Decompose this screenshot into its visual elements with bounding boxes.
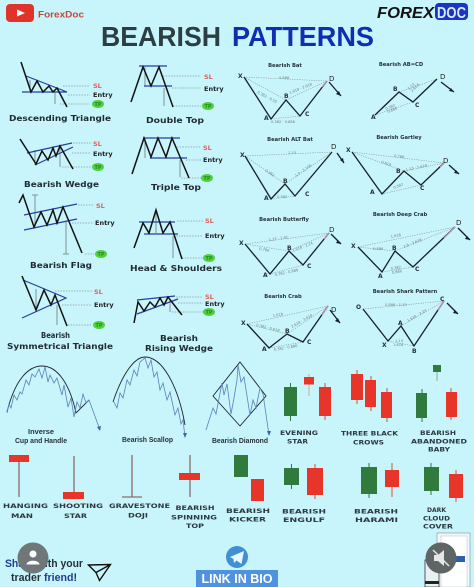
- candlestick: Gravestone Doji: GRAVESTONE: [109, 503, 170, 510]
- candlestick: Evening Star: STAR: [287, 438, 308, 446]
- harmonic pattern: Bearish Gartley: [346, 135, 459, 196]
- harmonic pattern: Bearish Shark: 1.618: [393, 343, 404, 347]
- harmonic pattern: Bearish ALT Bat: X: [240, 152, 245, 159]
- chart pattern: Bearish Flag: [19, 195, 115, 270]
- chart pattern: Head and Shoulders: Entry: [205, 232, 225, 240]
- harmonic pattern: Bearish Butterfly: X: [239, 240, 244, 247]
- harmonic pattern: Bearish ALT Bat: 0.382: [277, 195, 287, 199]
- harmonic pattern: Bearish Gartley: 0.618: [381, 160, 392, 167]
- harmonic pattern: Bearish Crab: 1.618: [272, 312, 284, 318]
- harmonic pattern: Bearish Shark: O: [356, 304, 361, 311]
- candlestick: Bearish Harami: [354, 463, 399, 524]
- harmonic pattern: Bearish Deep Crab: B: [392, 245, 397, 252]
- harmonic pattern: Bearish ALT Bat: 1.0 · 3.106: [294, 163, 313, 178]
- harmonic pattern: Bearish ALT Bat: 0.382: [264, 169, 275, 178]
- chart pattern: Bearish Flag: SL: [96, 202, 105, 210]
- harmonic pattern: Bearish Shark: 1.618 · 2.24: [406, 308, 428, 323]
- chart pattern: Descending Triangle: Descending Triangle: [9, 114, 112, 123]
- harmonic pattern: Bearish Butterfly: 1.618 · 2.24: [292, 241, 314, 253]
- harmonic pattern: Bearish AB=CD: C: [415, 102, 420, 109]
- logo: FOREX DOC: FOREX: [377, 5, 435, 22]
- harmonic pattern: Bearish Crab: B: [285, 328, 290, 335]
- harmonic pattern: Bearish Bat: D: [329, 75, 334, 83]
- harmonic pattern: Bearish Shark: C: [440, 296, 445, 303]
- chart pattern: Bearish Rising Wedge: SL: [205, 293, 214, 301]
- candlestick: Evening Star: [280, 374, 331, 446]
- chart pattern: Descending Triangle: SL: [93, 82, 102, 90]
- candlestick: Evening Star: EVENING: [280, 430, 318, 437]
- candlestick: Bearish Kicker: [226, 455, 270, 524]
- harmonic pattern: Bearish Gartley: 0.786: [394, 154, 405, 159]
- harmonic pattern: Bearish Butterfly: C: [307, 263, 312, 270]
- harmonic pattern: Bearish Deep Crab: 2.8 · 3.618: [403, 238, 423, 249]
- harmonic pattern: Bearish Crab: 0.382 · 0.886: [273, 344, 299, 352]
- harmonic pattern: Bearish Crab: C: [307, 339, 312, 346]
- harmonic pattern: Bearish Butterfly: 0.382 · 0.886: [274, 268, 299, 277]
- share call to action: trader friend!: [11, 572, 77, 584]
- harmonic pattern: Bearish AB=CD: D: [440, 73, 445, 81]
- chart pattern: Double Top: Double Top: [146, 116, 204, 125]
- harmonic pattern: Bearish AB=CD: 1.13: [407, 82, 416, 91]
- candlestick: Three Black Crows: THREE BLACK: [341, 430, 398, 438]
- harmonic pattern: Bearish Gartley: 0.382: [393, 182, 404, 190]
- candlestick: Bearish Kicker: BEARISH: [226, 508, 270, 515]
- chart pattern: Bearish Scallop: Bearish Scallop: [122, 435, 173, 444]
- harmonic pattern: Bearish Butterfly: Bearish Butterfly: [259, 217, 310, 223]
- chart pattern: Bearish Flag: Entry: [95, 219, 115, 227]
- harmonic pattern: Bearish Gartley: B: [396, 168, 401, 175]
- harmonic pattern: Bearish Shark: A: [398, 320, 403, 327]
- candlestick: Dark Cloud Cover: COVER: [423, 524, 453, 530]
- candlestick: Bearish Harami: HARAMI: [355, 517, 398, 524]
- harmonic pattern: Bearish Deep Crab: 0.886: [373, 247, 384, 251]
- channel badge: ForexDoc: ForexDoc: [38, 10, 84, 20]
- share call to action: Share with your: [5, 558, 84, 570]
- harmonic pattern: Bearish Bat: 0.382 · 0.50: [257, 90, 278, 104]
- harmonic pattern: Bearish Bat: 0.382 · 0.886: [271, 120, 296, 124]
- chart pattern: Descending Triangle: TP: [94, 102, 102, 108]
- chart pattern: Triple Top: TP: [204, 176, 211, 182]
- chart pattern: Bearish Wedge: TP: [94, 165, 102, 171]
- harmonic pattern: Bearish Bat: A: [264, 115, 269, 122]
- harmonic pattern: Bearish AB=CD: [371, 62, 454, 121]
- harmonic pattern: Bearish ALT Bat: C: [305, 191, 310, 198]
- harmonic pattern: Bearish Gartley: 1.13 · 1.618: [405, 163, 428, 172]
- harmonic pattern: Bearish Gartley: A: [370, 189, 375, 196]
- chart pattern: Bearish Flag: TP: [98, 252, 105, 258]
- candlestick: Shooting Star: [53, 456, 103, 520]
- harmonic pattern: Bearish Crab: 2.618 · 3.618: [290, 313, 314, 329]
- candlestick: Hanging Man: [3, 455, 48, 520]
- harmonic pattern: Bearish Bat: 1.618 · 2.618: [289, 82, 313, 95]
- candlestick: Shooting Star: SHOOTING: [53, 503, 103, 510]
- harmonic pattern: Bearish Butterfly: B: [287, 245, 292, 252]
- harmonic pattern: Bearish Bat: X: [238, 73, 243, 80]
- harmonic pattern: Bearish Bat: C: [305, 111, 310, 118]
- candlestick: Bearish Engulf: ENGULF: [283, 517, 325, 524]
- chart pattern: Head and Shoulders: [130, 210, 225, 273]
- chart pattern: Inverse Cup and Handle: [7, 366, 101, 445]
- harmonic pattern: Bearish ALT Bat: B: [283, 178, 288, 185]
- chart pattern: Bearish Wedge: Bearish Wedge: [24, 180, 100, 189]
- icon: telegram: [226, 546, 248, 568]
- candlestick: Bearish Kicker: KICKER: [229, 516, 266, 524]
- harmonic pattern: Bearish Deep Crab: 0.382: [390, 265, 401, 271]
- candlestick: Shooting Star: STAR: [64, 513, 87, 520]
- harmonic pattern: Bearish AB=CD: 0.886: [387, 106, 399, 114]
- harmonic pattern: Bearish Butterfly: D: [329, 226, 334, 234]
- chart pattern: Double Top: Entry: [204, 85, 224, 93]
- chart pattern: Bearish Rising Wedge: Bearish: [160, 334, 198, 343]
- harmonic pattern: Bearish Deep Crab: 1.618: [390, 233, 402, 239]
- chart pattern: Bearish Rising Wedge: [134, 293, 225, 353]
- candlestick: Gravestone Doji: DOJI: [128, 512, 148, 520]
- harmonic pattern: Bearish Deep Crab: C: [415, 266, 420, 273]
- candlestick: Bearish Spinning Top: BEARISH: [176, 505, 214, 512]
- candlestick: Dark Cloud Cover: CLOUD: [423, 516, 450, 522]
- harmonic pattern: Bearish Bat: [238, 63, 341, 124]
- chart pattern: Bearish Wedge: SL: [93, 140, 102, 148]
- chart pattern: Head and Shoulders: TP: [206, 256, 213, 262]
- harmonic pattern: Bearish Deep Crab: Bearish Deep Crab: [373, 212, 427, 218]
- harmonic pattern: Bearish Crab: X: [241, 320, 246, 327]
- chart pattern: Descending Triangle: Entry: [93, 91, 113, 99]
- chart pattern: Bearish Scallop: [113, 357, 187, 444]
- icon: avatar: [18, 542, 48, 574]
- harmonic pattern: Bearish Bat: B: [284, 93, 289, 100]
- harmonic pattern: Bearish ALT Bat: [240, 137, 344, 202]
- harmonic pattern: Bearish Bat: 0.886: [279, 76, 290, 80]
- chart pattern: Bearish Symmetrical Triangle: TP: [96, 323, 103, 329]
- candlestick: Bearish Harami: BEARISH: [354, 508, 398, 516]
- candlestick: Gravestone Doji: [109, 455, 170, 520]
- share call to action: [5, 558, 84, 584]
- harmonic pattern: Bearish Deep Crab: X: [351, 243, 356, 250]
- chart pattern: Head and Shoulders: SL: [205, 217, 214, 225]
- book cover: [425, 533, 470, 587]
- harmonic pattern: Bearish Gartley: Bearish Gartley: [376, 135, 422, 141]
- chart pattern: Bearish Diamond: Bearish Diamond: [212, 436, 268, 445]
- candlestick: Bearish Abandoned Baby: ABANDONED: [411, 438, 467, 446]
- chart pattern: Descending Triangle: [9, 62, 113, 123]
- harmonic pattern: Bearish Butterfly: 1.27 · 1.41: [269, 235, 288, 242]
- candlestick: Three Black Crows: CROWS: [353, 440, 384, 446]
- candlestick: Hanging Man: MAN: [11, 513, 33, 520]
- harmonic pattern: Bearish AB=CD: 0.382: [385, 103, 396, 111]
- chart pattern: Bearish Symmetrical Triangle: SL: [94, 288, 103, 296]
- chart pattern: Triple Top: [132, 138, 223, 192]
- harmonic pattern: Bearish Crab: 0.382 · 0.618: [256, 323, 281, 333]
- chart pattern: Bearish Symmetrical Triangle: Entry: [94, 301, 114, 309]
- chart pattern: Bearish Wedge: Entry: [93, 150, 113, 158]
- harmonic pattern: Bearish Gartley: D: [443, 157, 448, 165]
- harmonic pattern: Bearish ALT Bat: A: [264, 195, 269, 202]
- harmonic pattern: Bearish Deep Crab: [351, 212, 470, 280]
- chart pattern: Triple Top: Entry: [203, 156, 223, 164]
- logo: FOREX DOC: [377, 3, 468, 22]
- harmonic pattern: Bearish Shark: 0.886 · 1.13: [385, 303, 407, 307]
- harmonic pattern: Bearish Shark: X: [382, 342, 387, 349]
- harmonic pattern: Bearish Shark: Bearish Shark Pattern: [373, 289, 438, 295]
- harmonic pattern: Bearish Butterfly: 0.786: [259, 247, 270, 253]
- chart pattern: Bearish Rising Wedge: Rising Wedge: [145, 344, 214, 353]
- title: PATTERNS: [232, 21, 374, 52]
- chart pattern: Triple Top: Triple Top: [151, 183, 201, 192]
- candlestick: Three Black Crows: [341, 370, 398, 446]
- candlestick: Bearish Engulf: [282, 464, 326, 524]
- logo: FOREX DOC: DOC: [437, 5, 466, 22]
- candlestick: Bearish Spinning Top: TOP: [186, 523, 205, 530]
- chart pattern: Double Top: SL: [204, 73, 213, 81]
- candlestick: Bearish Abandoned Baby: BABY: [428, 446, 451, 454]
- harmonic pattern: Bearish ALT Bat: 1.13: [288, 151, 296, 155]
- candlestick: Hanging Man: HANGING: [3, 503, 48, 510]
- chart pattern: Bearish Flag: Bearish Flag: [30, 261, 92, 270]
- chart pattern: Bearish Symmetrical Triangle: Symmetrical Triangle: [7, 342, 114, 351]
- chart pattern: Bearish Rising Wedge: Entry: [205, 300, 225, 308]
- harmonic pattern: Bearish ALT Bat: D: [331, 143, 336, 151]
- harmonic pattern: Bearish Crab: [241, 294, 340, 353]
- candlestick: Bearish Spinning Top: [171, 455, 217, 530]
- harmonic pattern: Bearish Bat: Bearish Bat: [268, 63, 302, 69]
- harmonic pattern: Bearish Deep Crab: D: [456, 219, 461, 227]
- chart pattern: Inverse Cup and Handle: Inverse: [28, 427, 54, 436]
- harmonic pattern: Bearish Shark: 1.13: [395, 339, 403, 343]
- chart pattern: Bearish Rising Wedge: TP: [206, 310, 213, 316]
- harmonic pattern: Bearish Gartley: C: [420, 185, 425, 192]
- harmonic pattern: Bearish AB=CD: Bearish AB=CD: [379, 62, 424, 68]
- link in bio button: LINK IN BIO: [202, 571, 272, 586]
- icon: muted speaker: [426, 542, 456, 574]
- title: BEARISH: [101, 21, 221, 52]
- chart pattern: Bearish Symmetrical Triangle: [7, 276, 114, 351]
- harmonic pattern: Bearish Deep Crab: A: [378, 273, 383, 280]
- harmonic pattern: Bearish Shark: [356, 289, 458, 355]
- harmonic pattern: Bearish ALT Bat: Bearish ALT Bat: [267, 137, 313, 143]
- chart pattern: Double Top: [131, 66, 224, 125]
- candlestick: Bearish Spinning Top: SPINNING: [171, 514, 217, 522]
- chart pattern: Double Top: TP: [204, 104, 212, 110]
- harmonic pattern: Bearish Shark: B: [412, 348, 417, 355]
- harmonic pattern: Bearish Deep Crab: 0.886: [391, 269, 403, 275]
- candlestick: Dark Cloud Cover: DARK: [427, 507, 446, 514]
- harmonic pattern: Bearish Crab: Bearish Crab: [264, 294, 302, 300]
- candlestick: Bearish Abandoned Baby: BEARISH: [420, 430, 456, 437]
- chart pattern: Inverse Cup and Handle: Cup and Handle: [15, 436, 67, 445]
- candlestick: Dark Cloud Cover: [423, 463, 463, 530]
- icon: paper plane: [88, 564, 110, 580]
- harmonic pattern: Bearish Crab: D: [331, 306, 336, 314]
- chart pattern: Head and Shoulders: Head & Shoulders: [130, 264, 222, 273]
- harmonic pattern: Bearish AB=CD: A: [371, 114, 376, 121]
- candlestick: Bearish Abandoned Baby: [411, 365, 467, 454]
- harmonic pattern: Bearish AB=CD: B: [393, 86, 398, 93]
- candlestick: Bearish Engulf: BEARISH: [282, 508, 326, 516]
- harmonic pattern: Bearish Crab: A: [262, 346, 267, 353]
- harmonic pattern: Bearish Butterfly: [239, 217, 341, 279]
- harmonic pattern: Bearish AB=CD: 2.618: [410, 82, 421, 93]
- harmonic pattern: Bearish Butterfly: A: [263, 272, 268, 279]
- channel badge: ForexDoc: [6, 4, 84, 22]
- chart pattern: Bearish Diamond: [206, 362, 271, 445]
- chart pattern: Triple Top: SL: [203, 144, 212, 152]
- chart pattern: Bearish Symmetrical Triangle: Bearish: [41, 331, 70, 340]
- chart pattern: Bearish Wedge: [20, 139, 113, 189]
- harmonic pattern: Bearish Gartley: X: [346, 147, 351, 154]
- title: [101, 21, 374, 52]
